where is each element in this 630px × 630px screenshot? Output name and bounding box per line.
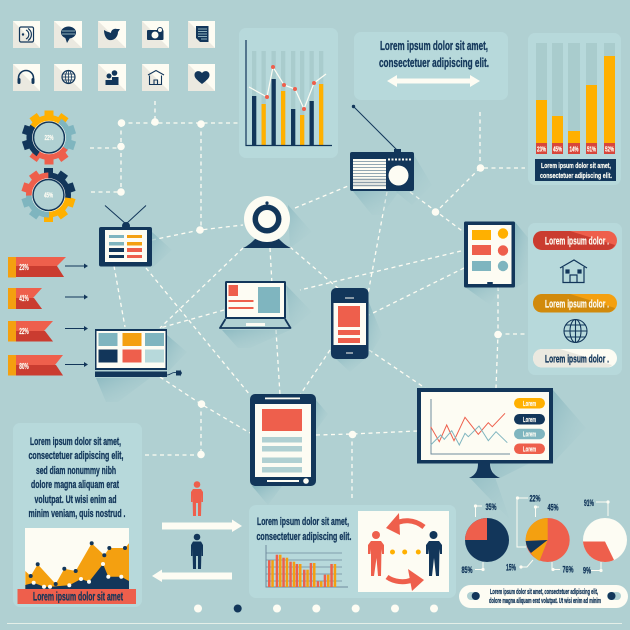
panel: percentage columns: 45% — [553, 144, 562, 154]
pie chart 45% 22% 15% 76%: 22% — [530, 494, 540, 504]
icon: house — [560, 260, 587, 282]
gear 45%: 45% — [44, 192, 53, 200]
caption pill with toggles — [459, 585, 628, 608]
panel: percentage columns: 23% — [537, 144, 546, 154]
area chart: Lorem ipsum dolor sit amet — [33, 592, 123, 604]
text block — [28, 436, 126, 520]
tv — [99, 206, 172, 268]
navy person — [191, 534, 203, 569]
panel: percentage columns — [528, 33, 621, 185]
red person — [191, 481, 203, 516]
radio — [350, 105, 432, 215]
network nodes — [117, 118, 502, 458]
pie chart 35% 85%: 35% — [486, 502, 496, 512]
arrow left — [152, 570, 232, 582]
text block: volutpat. Ut wisi enim ad — [34, 494, 116, 506]
gear 22% — [22, 110, 76, 164]
text block: dolore magna aliquam erat — [31, 479, 119, 491]
panel: text and area chart — [13, 423, 142, 607]
icon: heart tile — [188, 64, 215, 91]
pill: red label — [533, 231, 617, 250]
ribbon 41% with arrow: 41% — [19, 294, 29, 303]
icon: speech bubble tile — [54, 21, 82, 48]
laptop — [220, 281, 312, 348]
tablet with buttons — [464, 222, 530, 305]
icon: headphones tile — [13, 64, 40, 91]
exchange card — [358, 511, 449, 592]
panel: text, bar chart and exchange: Lorem ipsum dolor sit amet, — [257, 516, 349, 528]
text block: Lorem ipsum dolor sit amet, — [30, 436, 121, 448]
gear 45% — [21, 168, 76, 222]
text block: consectetuer adipiscing elit, — [28, 450, 124, 462]
icon: globe — [564, 320, 587, 342]
panel: percentage columns: 51% — [587, 144, 596, 154]
ribbon 23% with arrow — [8, 257, 88, 278]
panel: headline with double arrow: consectetuer adipiscing elit. — [379, 55, 489, 70]
pie chart 91% 9%: 9% — [583, 566, 591, 576]
text block: sed diam nonummy nibh — [36, 465, 116, 477]
ribbon 80% with arrow: 80% — [19, 362, 29, 371]
smartphone — [331, 288, 382, 372]
icon: bird tile — [98, 21, 126, 48]
monitor with tiles — [95, 329, 187, 402]
pie chart 91% 9% — [583, 498, 627, 576]
pie chart 35% 85% — [462, 502, 509, 575]
icon: document tile — [188, 21, 215, 48]
panel: text, bar chart and exchange — [249, 505, 456, 598]
ribbon 80% with arrow — [8, 355, 88, 376]
pagination dots — [194, 604, 438, 612]
panel: percentage columns: 52% — [605, 144, 614, 154]
icon: globe tile — [54, 64, 82, 91]
pie chart 45% 22% 15% 76%: 15% — [506, 562, 516, 572]
gear 22%: 22% — [44, 135, 54, 142]
panel: text, bar chart and exchange: consectetuer adipiscing elit. — [256, 531, 352, 543]
small bar chart — [266, 545, 348, 587]
icon: house tile — [142, 64, 169, 91]
ribbon 41% with arrow — [8, 288, 88, 309]
legend pills: Lorem — [523, 432, 536, 438]
icon: people tile — [98, 64, 126, 91]
text block: minim veniam, quis nostrud . — [28, 508, 126, 520]
pie chart 45% 22% 15% 76%: 45% — [548, 502, 558, 512]
ribbon 23% with arrow: 23% — [19, 263, 29, 272]
ribbon 22% with arrow: 22% — [19, 327, 29, 336]
icon: speaker tile — [13, 21, 40, 48]
ribbon 22% with arrow — [8, 321, 88, 342]
icon: camera tile — [142, 21, 169, 48]
centre tablet — [250, 394, 328, 505]
panel: bar and line chart — [239, 28, 338, 158]
pill: orange label — [533, 294, 617, 312]
pie chart 45% 22% 15% 76% — [506, 494, 574, 574]
panel: headline with double arrow — [354, 32, 508, 100]
pie chart 91% 9%: 91% — [584, 498, 594, 508]
legend pills: Lorem — [523, 401, 536, 408]
webcam — [243, 196, 312, 248]
legend pills: Lorem — [523, 446, 536, 454]
panel: labelled pills — [528, 223, 622, 375]
pie chart 35% 85%: 85% — [462, 565, 472, 575]
icon tile grid — [13, 21, 215, 91]
legend pills — [514, 398, 545, 454]
pill: cream label — [533, 349, 617, 368]
arrow right — [162, 520, 242, 532]
pie chart 45% 22% 15% 76%: 76% — [562, 564, 574, 574]
legend pills: Lorem — [523, 417, 536, 424]
panel: percentage columns: 14% — [570, 144, 579, 154]
panel: headline with double arrow: Lorem ipsum dolor sit amet, — [380, 38, 488, 53]
desktop monitor with line chart — [417, 388, 586, 520]
area chart — [18, 528, 136, 604]
